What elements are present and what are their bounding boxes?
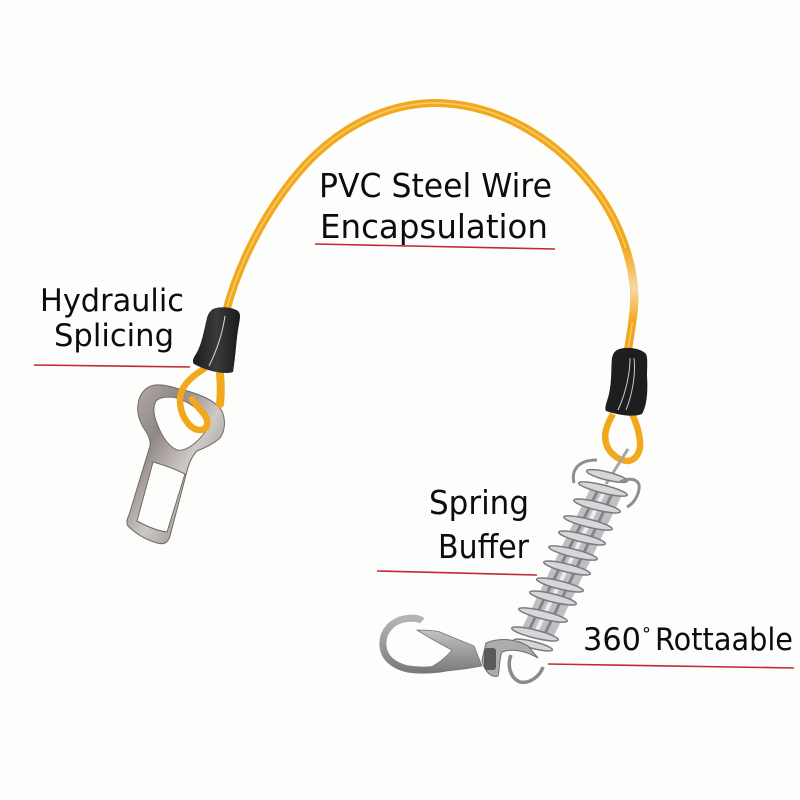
label: Hydraulic Splicing: Hydraulic — [40, 283, 184, 319]
spring inner highlights — [534, 492, 604, 636]
label: 360 degree Rottaable — [548, 622, 794, 668]
orange wire loop through buckle — [180, 369, 221, 430]
swivel barrel — [484, 648, 496, 670]
right orange wire loop — [605, 414, 640, 461]
label: 360 degree Rottaable: ° — [642, 624, 651, 645]
label: 360 degree Rottaable: 360 — [583, 622, 641, 658]
label: Spring Buffer — [377, 483, 537, 575]
label: Spring Buffer: Spring — [429, 483, 529, 522]
steel link from loop to spring — [606, 449, 628, 484]
hook curved loop — [383, 618, 446, 670]
infographic canvas — [34, 99, 794, 684]
left black ferrule — [193, 307, 240, 373]
hook body wedge — [417, 630, 482, 672]
spring centre rods — [527, 490, 612, 640]
label: Hydraulic Splicing: Splicing — [54, 318, 174, 354]
label: Spring Buffer: Buffer — [438, 527, 529, 566]
swivel ring — [509, 655, 543, 682]
metal seat-belt buckle — [127, 385, 224, 544]
coil spring buffer — [511, 460, 639, 653]
swivel fork — [482, 640, 538, 676]
label: PVC Steel Wire Encapsulation: Encapsulation — [320, 207, 548, 246]
label: Hydraulic Splicing — [34, 283, 190, 367]
right black ferrule — [605, 348, 647, 416]
label: 360 degree Rottaable: Rottaable — [655, 622, 793, 658]
orange PVC steel wire — [226, 103, 634, 350]
spring top hooks — [573, 460, 639, 507]
label: PVC Steel Wire Encapsulation — [315, 166, 555, 249]
label: PVC Steel Wire Encapsulation: PVC Steel Wire — [319, 166, 552, 205]
spring inner body — [522, 485, 622, 640]
spring coil discs — [511, 467, 628, 653]
snap hook — [383, 618, 543, 682]
